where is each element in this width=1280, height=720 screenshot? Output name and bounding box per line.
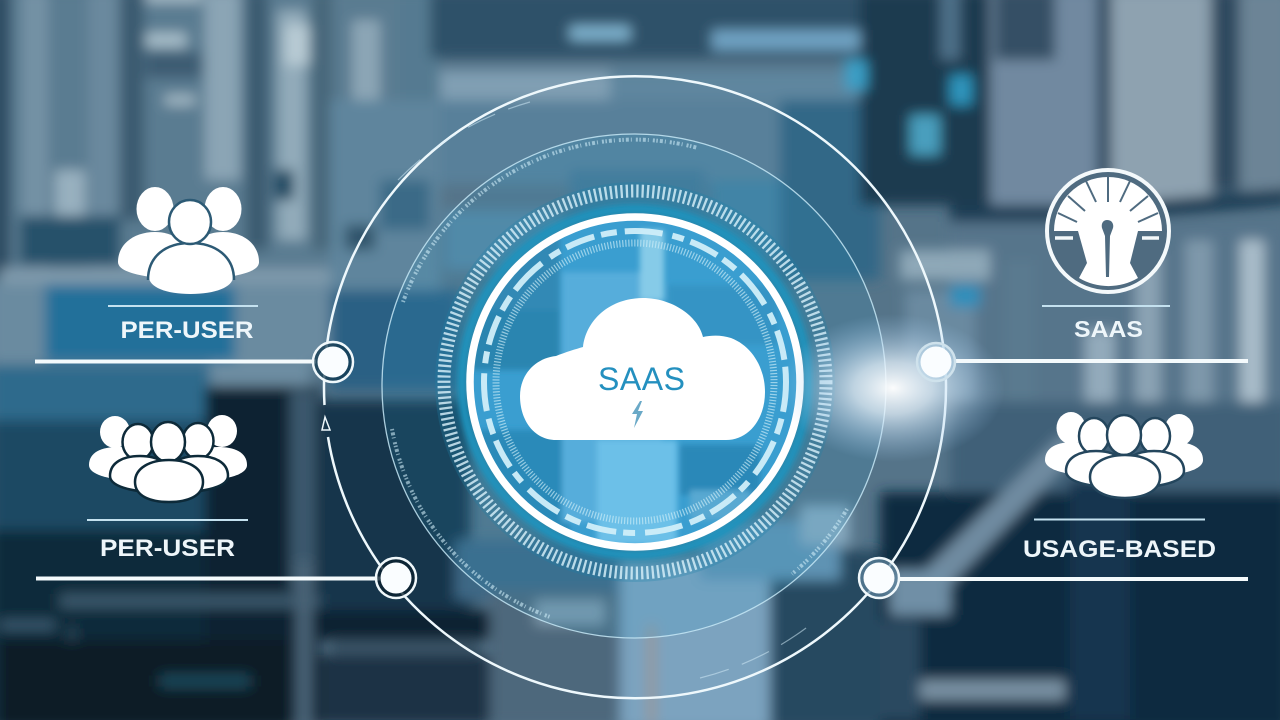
outer ring: [324, 76, 946, 698]
right side: [860, 0, 990, 205]
node: [859, 558, 899, 598]
centre: [430, 0, 870, 58]
label: USAGE-BASED: [1023, 536, 1216, 563]
panel: per-user top left: [35, 187, 353, 382]
icon: cloud with SAAS label: [520, 298, 765, 440]
divider: [87, 519, 248, 521]
connector line: [35, 360, 316, 364]
panel: usage-based lower right: [859, 412, 1248, 598]
node: [376, 558, 416, 598]
blurred core structure: [470, 220, 778, 545]
panel: per-user lower left: [36, 415, 416, 598]
cloud label: SAAS: [598, 361, 685, 397]
connector line: [955, 359, 1248, 363]
label: PER-USER: [100, 535, 235, 562]
label: SAAS: [1074, 316, 1143, 342]
disc tint: [382, 134, 886, 638]
divider: [1034, 518, 1205, 520]
central holographic disc: [322, 76, 946, 698]
left stripes: [0, 0, 440, 285]
glowing core: [469, 216, 801, 548]
lens flare: [781, 314, 1005, 462]
thin inner ring: [382, 134, 886, 638]
inner dashes near outer ring: [398, 102, 810, 678]
panel: SaaS gauge upper right: [917, 170, 1248, 381]
bright main ring: [470, 217, 800, 547]
icon: gauge: [1047, 170, 1169, 292]
ring marker: [322, 417, 330, 430]
dashed ring: [484, 231, 786, 533]
tick ring: [444, 191, 826, 573]
connector line: [900, 577, 1248, 581]
divider: [108, 305, 258, 307]
divider: [1042, 305, 1170, 307]
node: [917, 343, 955, 381]
node: [313, 342, 353, 382]
icon: group of five users: [1045, 412, 1203, 498]
icon: group of five users: [89, 415, 247, 502]
left middle: [0, 284, 330, 364]
label: PER-USER: [120, 317, 254, 344]
fine inner ticks: [496, 243, 774, 521]
cyan band: [462, 209, 808, 555]
icon: group of three users: [118, 187, 259, 294]
connector line: [36, 576, 380, 580]
data arcs: [392, 140, 847, 617]
icon: lightning bolt: [632, 401, 643, 428]
